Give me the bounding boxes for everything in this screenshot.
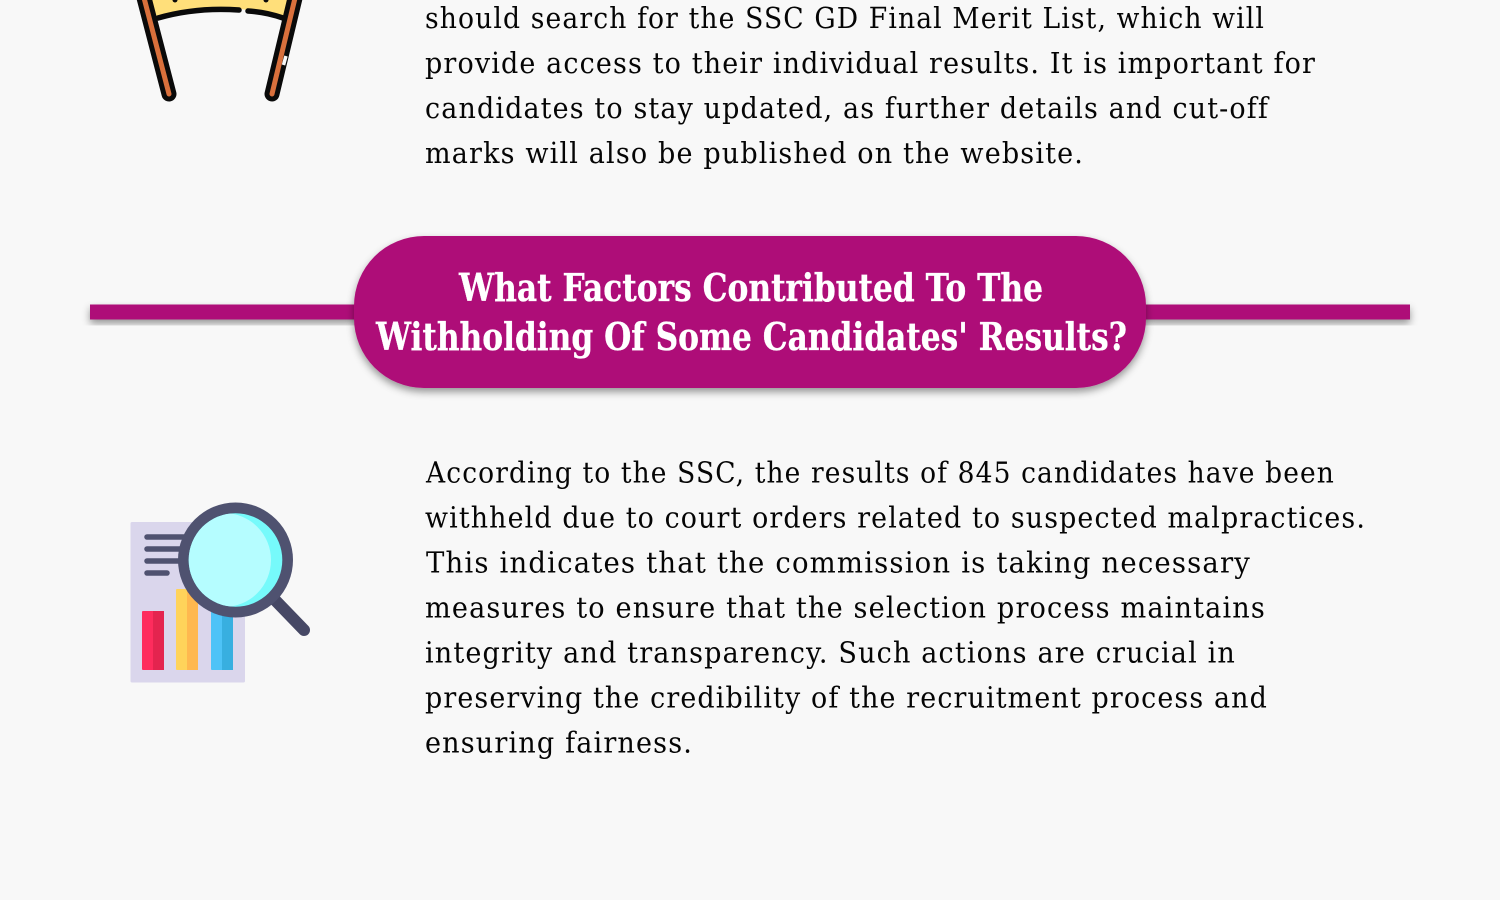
- magnifying glass lens: [188, 513, 282, 607]
- heading pill: [354, 236, 1146, 388]
- icon: report with bar chart and magnifying glass: [130, 502, 304, 682]
- text block: second paragraph: withheld due to court orders related to suspected malpractices.: [425, 502, 1366, 534]
- text block: first paragraph: should search for the SSC GD Final Merit List, which will: [425, 2, 1265, 35]
- text block: second paragraph: [425, 456, 1366, 760]
- text block: second paragraph: measures to ensure that the selection process maintains: [425, 592, 1266, 624]
- icon: banner on two poles (cropped at top): [141, 0, 297, 94]
- document text lines: [147, 537, 185, 573]
- text block: first paragraph: marks will also be published on the website.: [425, 137, 1084, 170]
- chart bars: [142, 589, 233, 670]
- text block: second paragraph: integrity and transparency. Such actions are crucial in: [425, 636, 1236, 670]
- text block: second paragraph: preserving the credibility of the recruitment process and: [425, 682, 1268, 714]
- text block: first paragraph: [425, 2, 1316, 170]
- text block: first paragraph: provide access to their individual results. It is important for: [425, 47, 1316, 80]
- magnifying glass ring: [178, 502, 293, 618]
- text block: second paragraph: This indicates that the commission is taking necessary: [426, 546, 1251, 580]
- document sheet: [130, 522, 245, 682]
- heading text: Withholding Of Some Candidates' Results?: [375, 315, 1127, 360]
- heading text: [375, 266, 1127, 360]
- text block: second paragraph: ensuring fairness.: [425, 726, 693, 760]
- heading text: What Factors Contributed To The: [458, 266, 1043, 311]
- section divider bar: [90, 304, 1410, 320]
- text block: first paragraph: candidates to stay updated, as further details and cut-off: [425, 92, 1270, 125]
- text block: second paragraph: According to the SSC, the results of 845 candidates have been: [425, 456, 1335, 490]
- magnifying glass handle: [275, 600, 304, 630]
